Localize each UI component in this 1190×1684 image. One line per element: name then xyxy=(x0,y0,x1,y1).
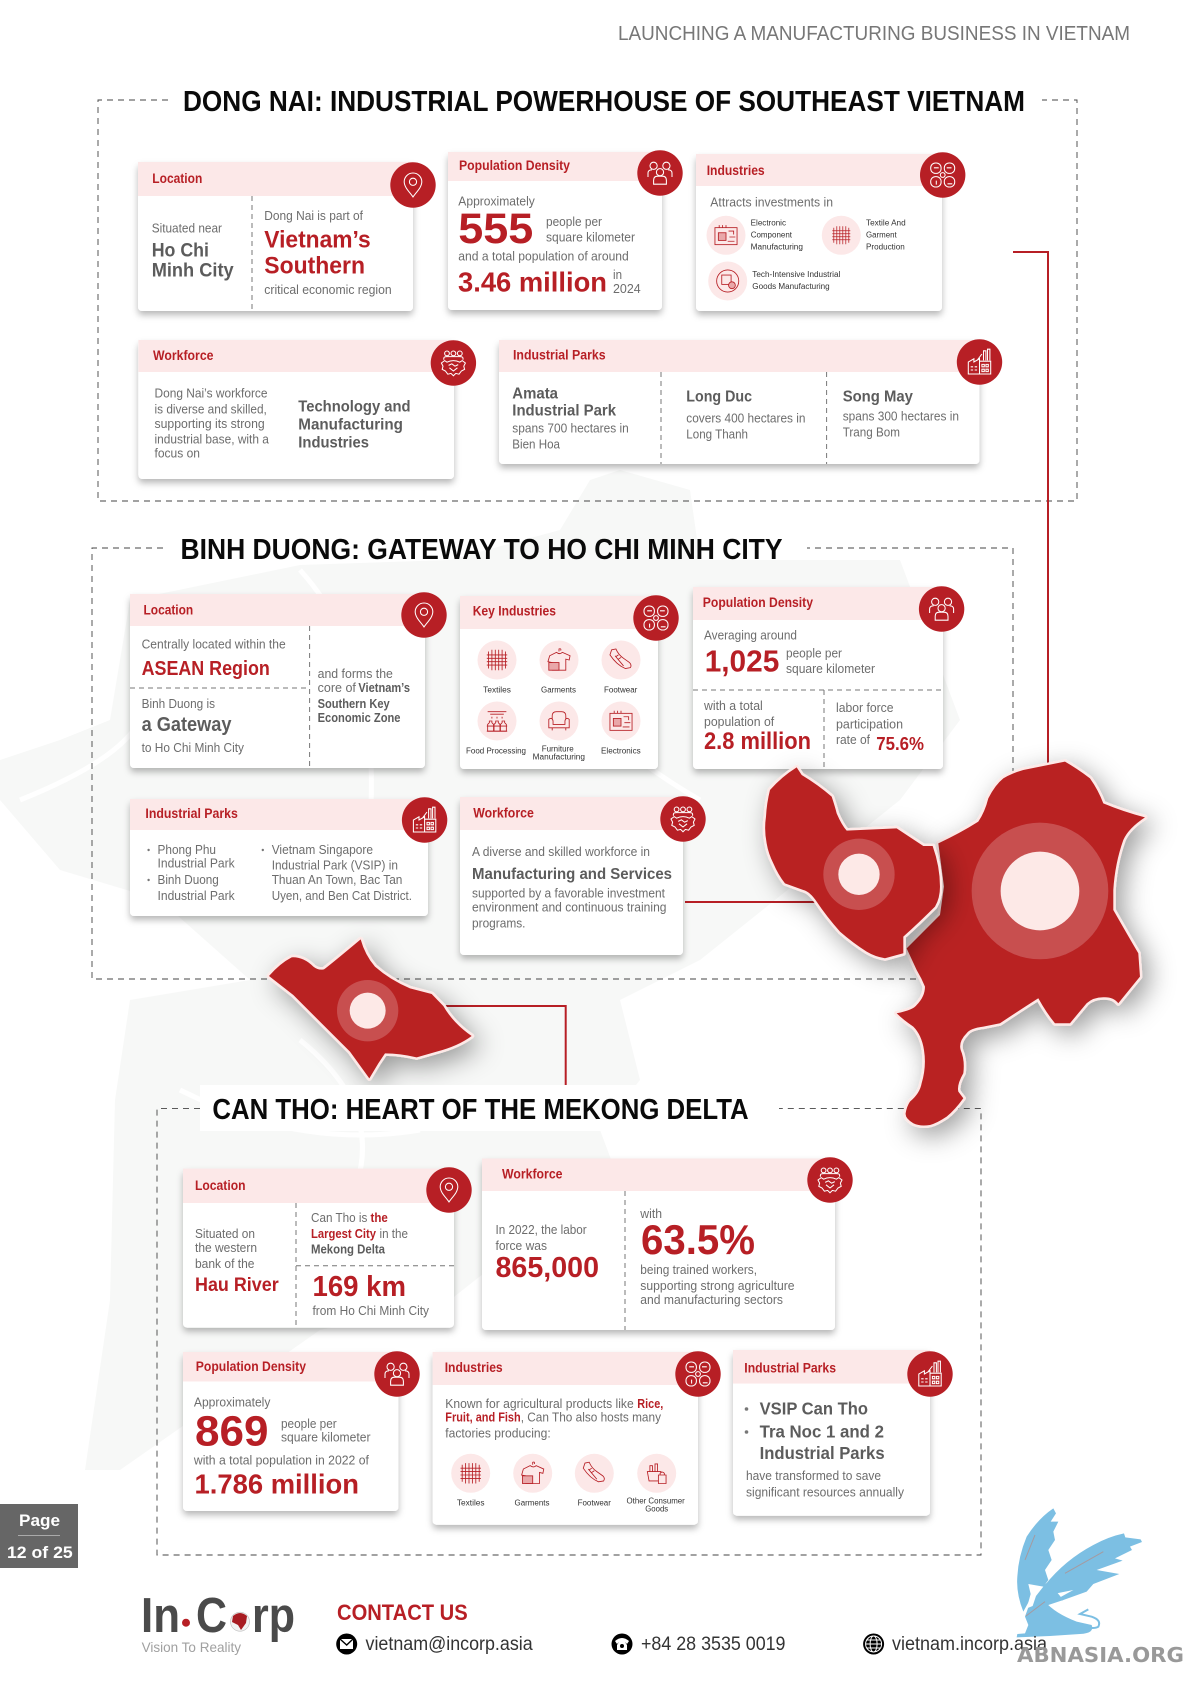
panel: Can Tho industrial parks: VSIP Can Tho xyxy=(760,1399,868,1419)
panel: Binh Duong industrial parks: Vietnam Singapore xyxy=(272,843,373,857)
panel: Dong Nai population density: 3.46 million xyxy=(458,267,607,298)
panel: Dong Nai workforce: supporting its strong xyxy=(154,417,265,431)
panel: Dong Nai industrial parks xyxy=(499,339,1002,464)
panel: Binh Duong workforce: Workforce xyxy=(473,806,534,820)
panel: Binh Duong key industries: Textiles xyxy=(483,685,511,694)
panel: Can Tho population density: Population Density xyxy=(196,1359,306,1374)
panel: Can Tho location: Can Tho is xyxy=(311,1211,367,1225)
panel: Can Tho population density: Approximately xyxy=(194,1396,271,1410)
panel: Can Tho workforce: Workforce xyxy=(502,1167,563,1182)
panel: Binh Duong industrial parks: Industrial Park xyxy=(158,889,235,903)
panel: Can Tho workforce: with xyxy=(639,1207,662,1221)
contact: website: vietnam.incorp.asia xyxy=(892,1634,1047,1655)
panel: Can Tho location: bank of the xyxy=(195,1257,255,1271)
panel: Dong Nai industrial parks: Industrial Park xyxy=(512,403,616,420)
panel: Can Tho population density: 869 xyxy=(195,1408,268,1456)
panel: Dong Nai industrial parks: spans 700 hectares in xyxy=(512,422,629,436)
page header: LAUNCHING A MANUFACTURING BUSINESS IN VIETNAM xyxy=(618,23,1130,45)
connector: Binh Duong xyxy=(685,901,820,903)
panel: Dong Nai industries xyxy=(696,152,965,311)
page number badge xyxy=(0,1504,78,1568)
panel: Dong Nai location: Southern xyxy=(264,252,365,279)
panel: Binh Duong location: to Ho Chi Minh City xyxy=(142,741,245,755)
panel: Can Tho population density: 1.786 million xyxy=(194,1469,359,1500)
panel: Dong Nai industrial parks: Trang Bom xyxy=(843,426,900,440)
panel: Can Tho location: Location xyxy=(195,1178,246,1193)
panel: Dong Nai population density: in xyxy=(613,268,622,282)
panel: Dong Nai location: Location xyxy=(152,171,202,186)
panel: Can Tho industries: Garments xyxy=(514,1498,550,1507)
panel: Can Tho industries: Fruit, and Fish xyxy=(445,1411,521,1425)
panel: Can Tho location: Largest City xyxy=(311,1227,376,1241)
panel: Binh Duong location: Economic Zone xyxy=(318,711,401,725)
panel: Dong Nai industries: Garment xyxy=(866,230,897,239)
panel: Binh Duong industrial parks: Binh Duong xyxy=(158,873,219,887)
panel: Dong Nai industries: Production xyxy=(866,242,905,251)
panel: Dong Nai industries: Manufacturing xyxy=(751,242,803,251)
panel: Can Tho population density: with a total population in 2022 of xyxy=(193,1454,369,1468)
panel: Can Tho industrial parks: Industrial Parks xyxy=(760,1443,885,1463)
panel: Dong Nai workforce: focus on xyxy=(154,446,200,460)
panel: Binh Duong key industries xyxy=(460,595,679,769)
panel: Can Tho location: in the xyxy=(380,1227,408,1241)
panel: Binh Duong industrial parks: Thuan An Town, Bac Tan xyxy=(272,873,402,887)
panel: Can Tho workforce: 865,000 xyxy=(496,1252,599,1284)
panel: Can Tho population density: square kilometer xyxy=(281,1431,370,1445)
panel: Dong Nai industrial parks: covers 400 hectares in xyxy=(686,412,806,426)
panel: Can Tho industries: Rice, xyxy=(637,1397,663,1411)
heading: Binh Duong: BINH DUONG: GATEWAY TO HO CHI MINH CITY xyxy=(180,534,782,566)
panel: Binh Duong industrial parks xyxy=(130,797,447,916)
panel: Can Tho workforce: supporting strong agriculture xyxy=(640,1279,795,1293)
section frame: Dong Nai xyxy=(98,100,1077,501)
panel: Binh Duong key industries: Key Industries xyxy=(473,604,556,619)
panel: Binh Duong location: Vietnam’s xyxy=(358,681,410,695)
panel: Can Tho population density xyxy=(183,1351,420,1511)
page number badge: 12 of 25 xyxy=(7,1543,73,1562)
panel: Dong Nai workforce: Manufacturing xyxy=(298,416,403,433)
panel: Dong Nai population density: square kilometer xyxy=(546,231,635,245)
panel: Binh Duong population density xyxy=(693,586,964,769)
panel: Binh Duong location: Centrally located within the xyxy=(142,638,286,652)
panel: Can Tho industrial parks: significant resources annually xyxy=(746,1485,905,1499)
panel: Dong Nai workforce: Dong Nai’s workforce xyxy=(154,387,268,401)
panel: Can Tho industries: Footwear xyxy=(578,1498,611,1507)
contact: phone: +84 28 3535 0019 xyxy=(641,1634,786,1655)
panel: Binh Duong industrial parks: Industrial Parks xyxy=(145,806,238,821)
panel: Dong Nai location: Vietnam’s xyxy=(264,226,371,253)
panel: Can Tho industries: Textiles xyxy=(457,1498,485,1507)
panel: Binh Duong population density: square kilometer xyxy=(786,662,875,676)
panel: Binh Duong industrial parks: Industrial Park (VSIP) in xyxy=(272,859,398,873)
panel: Dong Nai location: critical economic region xyxy=(264,283,392,297)
panel: Dong Nai location: Dong Nai is part of xyxy=(264,209,363,223)
map: Dong Nai xyxy=(897,762,1145,1126)
logo: InCorp: Vision To Reality xyxy=(142,1639,241,1655)
heading: Can Tho: CAN THO: HEART OF THE MEKONG DELTA xyxy=(212,1094,749,1126)
panel: Dong Nai population density: Approximately xyxy=(458,195,536,209)
panel: Binh Duong workforce: A diverse and skilled workforce in xyxy=(472,845,650,859)
panel: Binh Duong workforce: environment and continuous training xyxy=(472,900,667,914)
connector: Dong Nai xyxy=(1013,252,1048,770)
panel: Binh Duong population density: people per xyxy=(786,646,842,660)
panel: Dong Nai population density: 555 xyxy=(458,205,533,253)
panel: Dong Nai location xyxy=(138,162,436,311)
panel: Can Tho population density: people per xyxy=(281,1417,337,1431)
section frame: Binh Duong xyxy=(92,548,1013,979)
heading: Dong Nai: DONG NAI: INDUSTRIAL POWERHOUSE OF SOUTHEAST VIETNAM xyxy=(183,86,1025,118)
panel: Binh Duong population density: 1,025 xyxy=(705,644,779,678)
panel: Can Tho location: 169 km xyxy=(312,1271,406,1303)
panel: Dong Nai industries: Goods Manufacturing xyxy=(752,282,830,291)
panel: Can Tho workforce xyxy=(482,1157,853,1330)
panel: Dong Nai industrial parks: Song May xyxy=(843,389,913,406)
panel: Dong Nai location: Minh City xyxy=(152,261,234,282)
panel: Binh Duong location xyxy=(130,592,447,768)
panel: Dong Nai workforce: industrial base, with a xyxy=(154,432,269,446)
panel: Dong Nai industrial parks: spans 300 hectares in xyxy=(843,410,959,424)
panel: Binh Duong population density: rate of xyxy=(836,733,871,747)
panel: Dong Nai industries: Textile And xyxy=(866,218,906,227)
panel: Dong Nai industries: Tech-Intensive Industrial xyxy=(752,270,841,279)
panel: Binh Duong key industries: Food Processing xyxy=(466,746,526,755)
panel: Can Tho industries: Industries xyxy=(445,1360,503,1375)
panel: Dong Nai workforce xyxy=(138,340,476,479)
panel: Dong Nai industrial parks: Industrial Parks xyxy=(513,347,606,362)
panel: Dong Nai industrial parks: Long Duc xyxy=(686,389,752,406)
panel: Can Tho industrial parks: Tra Noc 1 and 2 xyxy=(760,1422,884,1442)
panel: Can Tho location: the western xyxy=(195,1241,257,1255)
panel: Binh Duong key industries: Garments xyxy=(541,685,576,694)
panel: Dong Nai workforce: Industries xyxy=(298,435,369,452)
panel: Can Tho industries: Known for agricultural products like xyxy=(445,1397,634,1411)
panel: Binh Duong population density: Population Density xyxy=(703,595,813,610)
panel: Binh Duong location: Southern Key xyxy=(318,697,390,711)
panel: Binh Duong location: and forms the xyxy=(318,667,393,681)
watermark: ABNASIA.ORG xyxy=(1017,1643,1184,1667)
panel: Binh Duong key industries: Electronics xyxy=(601,746,641,755)
panel: Can Tho industrial parks xyxy=(733,1350,953,1516)
griffin emblem xyxy=(1017,1508,1142,1637)
heading backing: Can Tho xyxy=(200,1085,770,1131)
panel: Dong Nai population density: Population Density xyxy=(459,158,570,173)
panel: Can Tho workforce: In 2022, the labor xyxy=(496,1223,587,1237)
panel: Can Tho location: Mekong Delta xyxy=(311,1243,386,1257)
logo: InCorp: C xyxy=(196,1589,227,1643)
map: Can Tho xyxy=(269,939,472,1078)
panel: Dong Nai location: Ho Chi xyxy=(152,241,209,262)
panel: Can Tho location: the xyxy=(370,1211,388,1225)
panel: Binh Duong workforce xyxy=(460,796,706,955)
logo: InCorp xyxy=(141,1589,295,1655)
panel: Binh Duong industrial parks: Phong Phu xyxy=(158,843,216,857)
logo: InCorp: In xyxy=(141,1589,180,1643)
panel: Binh Duong population density: participation xyxy=(836,717,903,731)
panel: Dong Nai population density xyxy=(448,150,683,310)
contact: email: vietnam@incorp.asia xyxy=(366,1634,533,1655)
panel: Binh Duong key industries: Footwear xyxy=(604,685,638,694)
panel: Can Tho workforce: being trained workers, xyxy=(640,1263,757,1277)
panel: Binh Duong population density: population of xyxy=(704,715,775,729)
panel: Can Tho location: Hau River xyxy=(195,1275,279,1296)
panel: Dong Nai industrial parks: Amata xyxy=(512,385,558,402)
panel: Can Tho industries: Other Consumer xyxy=(626,1496,685,1505)
panel: Dong Nai workforce: Workforce xyxy=(153,348,214,363)
panel: Dong Nai industrial parks: Bien Hoa xyxy=(512,437,560,451)
panel: Dong Nai location: Situated near xyxy=(152,222,222,236)
panel: Can Tho industries xyxy=(433,1351,721,1525)
panel: Binh Duong workforce: Manufacturing and Services xyxy=(472,866,672,883)
panel: Binh Duong workforce: supported by a favorable investment xyxy=(472,886,665,900)
panel: Binh Duong key industries: Furniture xyxy=(542,745,574,754)
panel: Binh Duong location: Location xyxy=(144,603,193,618)
panel: Dong Nai workforce: Technology and xyxy=(298,399,411,416)
panel: Dong Nai population density: people per xyxy=(546,215,602,229)
panel: Binh Duong location: a Gateway xyxy=(142,714,232,736)
panel: Dong Nai industrial parks: Long Thanh xyxy=(686,427,748,441)
panel: Dong Nai population density: and a total population of around xyxy=(458,250,629,264)
panel: Binh Duong location: ASEAN Region xyxy=(142,658,270,680)
panel: Binh Duong industrial parks: Industrial Park xyxy=(158,857,235,871)
panel: Can Tho location: from Ho Chi Minh City xyxy=(312,1304,430,1318)
panel: Binh Duong industrial parks: Uyen, and Ben Cat District. xyxy=(272,889,412,903)
panel: Dong Nai industries: Attracts investments in xyxy=(710,196,833,210)
panel: Binh Duong location: core of xyxy=(318,681,356,695)
panel: Binh Duong location: Binh Duong is xyxy=(142,697,215,711)
background map silhouette xyxy=(0,470,960,1470)
panel: Dong Nai industries: Electronic xyxy=(751,218,786,227)
logo: InCorp: rp xyxy=(252,1589,295,1643)
panel: Can Tho location xyxy=(183,1167,472,1328)
page number badge: Page xyxy=(19,1511,60,1530)
panel: Can Tho industries: , Can Tho also hosts many xyxy=(521,1411,662,1425)
map: Binh Duong xyxy=(765,767,940,958)
panel: Binh Duong population density: 2.8 million xyxy=(704,728,811,755)
panel: Can Tho workforce: force was xyxy=(496,1239,547,1253)
panel: Can Tho industries: Goods xyxy=(645,1504,668,1513)
panel: Can Tho workforce: 63.5% xyxy=(641,1216,755,1263)
panel: Dong Nai industries: Component xyxy=(751,230,793,239)
panel: Binh Duong workforce: programs. xyxy=(472,917,526,931)
panel: Dong Nai workforce: is diverse and skilled, xyxy=(154,402,267,416)
section frame: Can Tho xyxy=(157,1109,981,1555)
panel: Can Tho industrial parks: Industrial Parks xyxy=(744,1361,836,1376)
contact heading: CONTACT US xyxy=(337,1600,468,1625)
panel: Binh Duong population density: 75.6% xyxy=(876,734,924,754)
connector: Can Tho xyxy=(443,1006,566,1090)
panel: Binh Duong population density: labor force xyxy=(836,701,894,715)
panel: Dong Nai population density: 2024 xyxy=(613,282,641,296)
panel: Can Tho workforce: and manufacturing sectors xyxy=(640,1293,783,1307)
panel: Can Tho industrial parks: have transformed to save xyxy=(746,1469,881,1483)
panel: Can Tho industries: factories producing: xyxy=(445,1427,551,1441)
panel: Binh Duong population density: with a total xyxy=(703,699,763,713)
panel: Dong Nai industries: Industries xyxy=(707,163,765,178)
panel: Can Tho location: Situated on xyxy=(195,1227,255,1241)
panel: Binh Duong population density: Averaging around xyxy=(704,629,797,643)
panel: Binh Duong key industries: Manufacturing xyxy=(533,752,585,761)
